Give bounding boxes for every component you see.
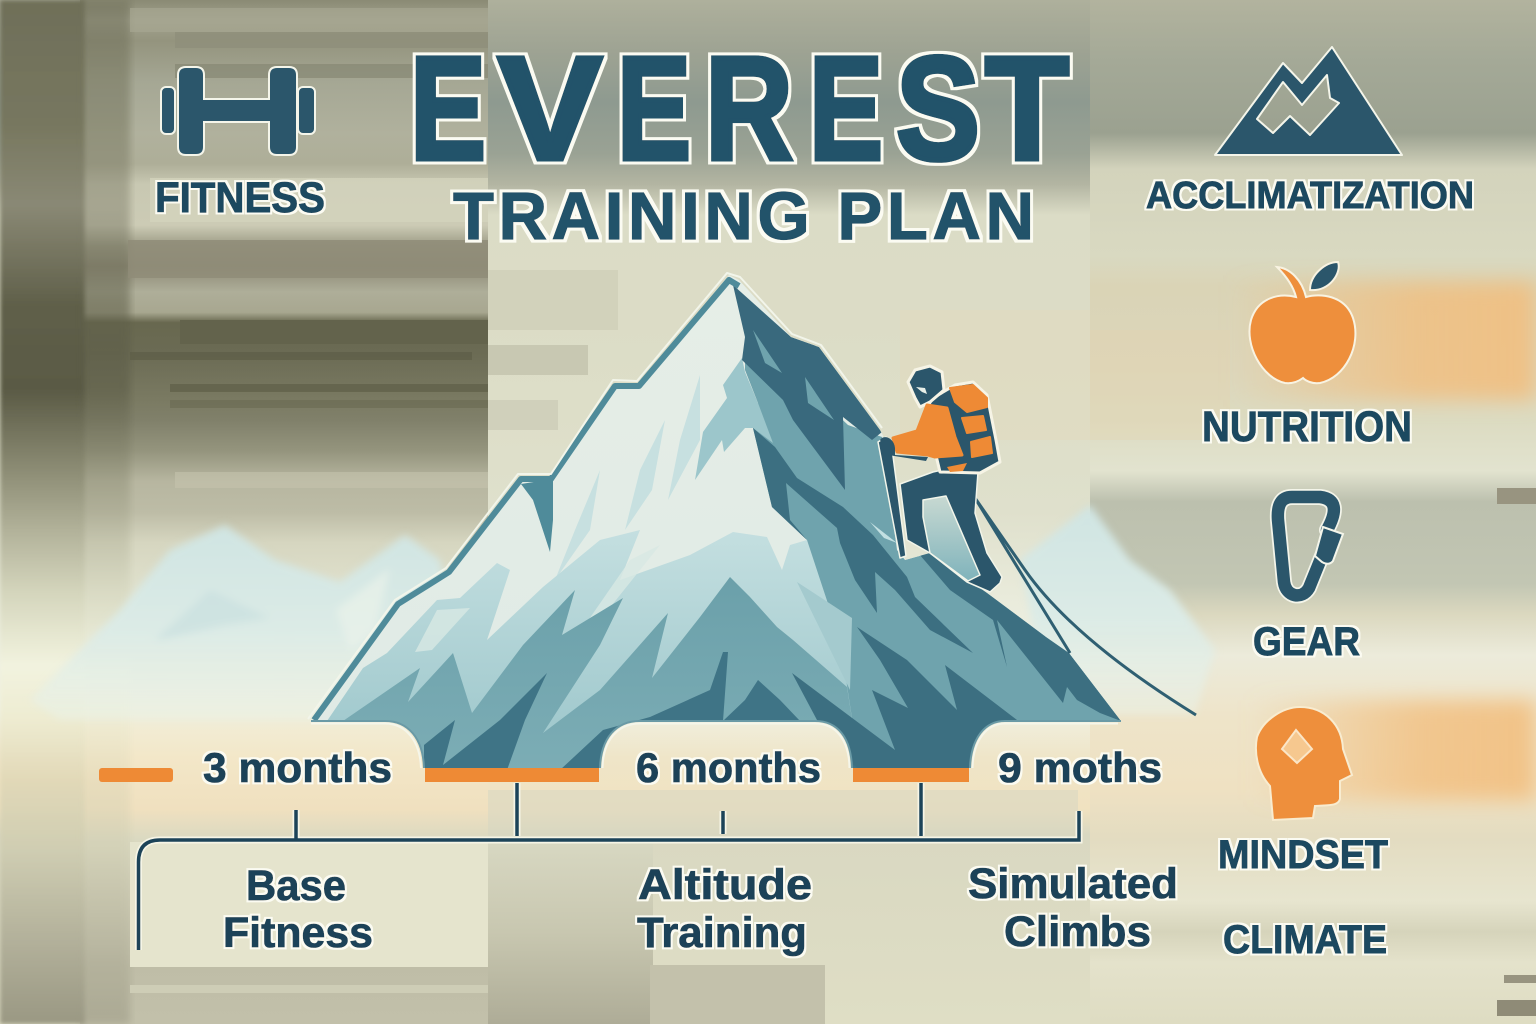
label: ACCLIMATIZATION: ACCLIMATIZATION xyxy=(1146,175,1474,217)
title xyxy=(410,27,1069,254)
backpack pockets xyxy=(950,385,992,457)
icon: carabiner xyxy=(1278,497,1343,595)
title: EVEREST: E xyxy=(809,27,883,191)
title: EVEREST: V xyxy=(498,27,602,191)
tab outlines xyxy=(311,721,1121,768)
mountain ridge highlight xyxy=(308,273,882,719)
label: GEAR: GEAR xyxy=(1253,620,1360,664)
mountain: snow-and-rock peak xyxy=(300,270,1130,775)
icon: head xyxy=(1256,707,1352,820)
face xyxy=(916,387,927,394)
fitness item xyxy=(155,67,325,222)
gap between legs xyxy=(923,496,980,581)
duration: 3 months: 3 months xyxy=(203,744,392,791)
label: CLIMATE: CLIMATE xyxy=(1223,918,1387,962)
gear item xyxy=(1253,497,1360,664)
icon: apple xyxy=(1249,262,1355,383)
phase: Base Fitness xyxy=(223,862,373,957)
ice axe xyxy=(878,437,906,558)
title: EVEREST: E xyxy=(617,27,691,191)
timeline xyxy=(99,744,1162,791)
label: NUTRITION: NUTRITION xyxy=(1202,403,1412,451)
background mountains xyxy=(30,505,1215,720)
duration: 6 months: 6 months xyxy=(636,744,821,791)
phase: Altitude Training: Altitude xyxy=(638,861,812,909)
rope xyxy=(975,498,1196,715)
legs xyxy=(900,470,1002,592)
phase: Simulated Climbs xyxy=(968,860,1178,956)
icon: dumbbell xyxy=(161,67,315,155)
label: FITNESS: FITNESS xyxy=(155,174,325,222)
bracket connector xyxy=(138,783,1079,950)
main mountain with climber xyxy=(300,270,1196,775)
phase: Base Fitness: Base xyxy=(246,862,346,910)
duration: 9 moths: 9 moths xyxy=(998,744,1162,791)
waist strap xyxy=(947,463,967,472)
orange timeline bars xyxy=(99,768,969,782)
mountain ridge outline xyxy=(314,280,739,720)
phase: Altitude Training: Training xyxy=(637,909,807,957)
title: EVEREST: S xyxy=(896,27,980,191)
climber xyxy=(878,366,1196,715)
phase: Altitude Training xyxy=(637,861,812,957)
icon: mountain xyxy=(1215,47,1402,155)
nutrition item xyxy=(1202,262,1412,451)
icon: diamond in head xyxy=(1282,730,1312,763)
jacket xyxy=(893,405,962,457)
phase: Simulated Climbs: Climbs xyxy=(1004,908,1151,956)
phase: Simulated Climbs: Simulated xyxy=(968,860,1178,908)
title: EVEREST: R xyxy=(705,27,793,191)
title: EVEREST: T xyxy=(985,27,1069,191)
phase: Base Fitness: Fitness xyxy=(223,909,373,957)
arm and glove xyxy=(880,437,928,461)
backpack xyxy=(925,382,1000,473)
label: MINDSET: MINDSET xyxy=(1218,833,1388,877)
acclimatization item xyxy=(1146,47,1474,217)
subtitle: TRAINING PLAN: TRAINING PLAN xyxy=(453,179,1034,254)
title: EVEREST: E xyxy=(410,27,486,191)
mindset item xyxy=(1218,707,1388,877)
head xyxy=(908,366,944,407)
